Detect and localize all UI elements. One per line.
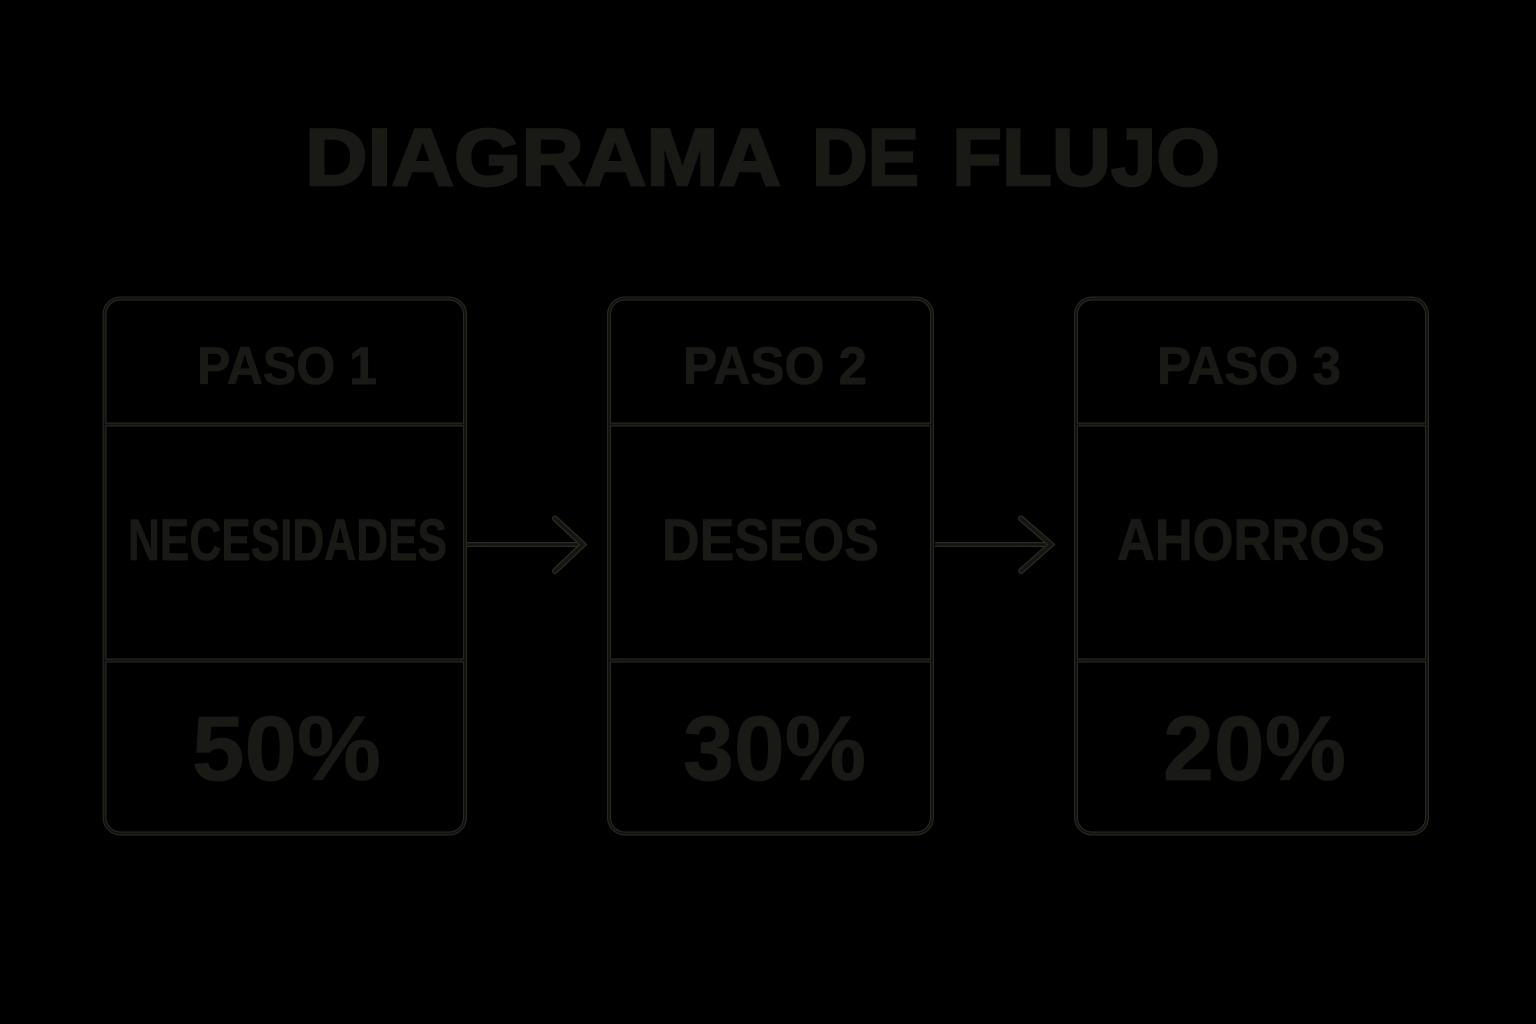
percentage 50: 50%	[192, 698, 381, 800]
title	[305, 113, 1220, 203]
step label 3: PASO 3	[1157, 337, 1341, 396]
arrow: paso 2 to paso 3	[935, 518, 1051, 571]
arrow: paso 1 to paso 2	[467, 518, 583, 571]
panel: paso 3 ahorros	[1076, 298, 1427, 834]
title: FLUJO	[952, 113, 1220, 203]
category label: ahorros: AHORROS	[1117, 508, 1385, 573]
category label: deseos: DESEOS	[662, 508, 879, 573]
step label 1: PASO 1	[197, 337, 377, 396]
title: DIAGRAMA	[305, 113, 781, 203]
panel: paso 1 necesidades	[104, 298, 465, 834]
percentage 30: 30%	[683, 698, 866, 800]
panel outline 3	[1076, 298, 1427, 834]
category label: necesidades: NECESIDADES	[128, 508, 447, 573]
panel outline 1	[104, 298, 465, 834]
panel outline 2	[609, 298, 932, 834]
percentage 20: 20%	[1163, 698, 1346, 800]
step label 2: PASO 2	[683, 337, 867, 396]
title: DE	[812, 113, 919, 203]
panel: paso 2 deseos	[609, 298, 932, 834]
